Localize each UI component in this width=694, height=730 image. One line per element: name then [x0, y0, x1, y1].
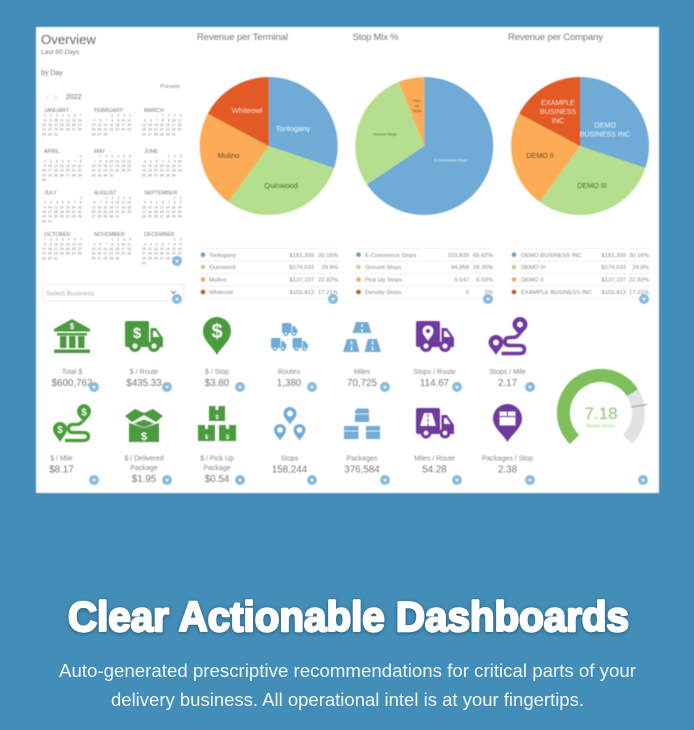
gauge: road hours: 7.18 [584, 404, 618, 423]
calendar: months: 12 13 14 15 16 17 18 [92, 123, 131, 127]
calendar: months: 28 29 30 31 [92, 173, 113, 177]
pie chart: stop mix: Stops [412, 109, 422, 113]
icon: dollar pin [203, 317, 231, 355]
icon: three roads [343, 322, 381, 352]
legend table: stop mix: 0 [466, 290, 470, 296]
calendar: months: MAY [94, 149, 106, 155]
pie chart: stop mix: Up [415, 104, 419, 108]
calendar: months: 1 [42, 155, 82, 159]
calendar: months: 15 16 17 18 19 20 21 [42, 247, 82, 251]
text: presets: Presets [160, 84, 180, 90]
calendar: months: 16 17 18 19 20 21 22 [42, 169, 82, 173]
calendar: months: 29 30 31 [42, 132, 58, 136]
calendar: months: 2 3 4 5 6 7 8 [42, 201, 82, 205]
legend table: revenue per terminal: Quinwood [209, 265, 236, 271]
legend table: revenue per company: $137,107 [601, 278, 626, 284]
legend table: stop mix: 9,547 [454, 278, 469, 284]
icon: open dollar box: $ [141, 431, 147, 443]
calendar: months: 9 10 11 12 13 14 15 [42, 205, 82, 209]
calendar: months: 26 27 28 29 30 [92, 256, 119, 260]
chart heading: revenue per terminal: Revenue per Terminal [197, 32, 288, 43]
legend table: revenue per company: 17.21% [629, 290, 650, 296]
legend table: revenue per company: DEMO BUSINESS INC [521, 253, 583, 259]
calendar: months: 22 23 24 25 26 27 28 [42, 252, 82, 256]
calendar: months: SEPTEMBER [144, 190, 177, 196]
chart heading: revenue per company: Revenue per Company [508, 32, 603, 43]
metric: packages: Packages [347, 456, 378, 462]
calendar: months: 2 3 4 5 6 7 8 [42, 159, 82, 163]
calendar: months: 1 2 [142, 196, 182, 200]
metric: dollars per mile: $8.17 [49, 464, 74, 476]
metric: dollars per mile [49, 456, 74, 476]
metric: dollars per stop: $ / Stop [205, 369, 229, 376]
calendar: months: AUGUST [94, 190, 117, 196]
metric: packages per stop: Packages / Stop [482, 456, 533, 462]
title: Clear Actionable Dashboards [68, 593, 629, 640]
legend table: stop mix: Pick Up Stops [365, 278, 402, 284]
calendar: months: MARCH [144, 108, 164, 114]
metric: stops per route: 114.67 [420, 378, 449, 389]
metric: dollars per route: $ / Route [130, 369, 158, 376]
metric: dollars per delivered package: $1.95 [132, 474, 157, 485]
calendar: months: 11 12 13 14 15 16 17 [142, 164, 182, 168]
legend table: revenue per terminal: Whiteowl [209, 290, 233, 296]
calendar: months: 16 17 18 19 20 21 22 [42, 210, 82, 214]
calendar: months: JUNE [144, 149, 158, 155]
dropdown: select business: Select Business [46, 290, 95, 298]
gauge: road hours: Road Hours [587, 424, 616, 430]
calendar: months: 14 15 16 17 18 19 20 [92, 164, 131, 168]
calendar: months: 1 2 3 4 [92, 114, 131, 118]
metric: total dollars [52, 369, 92, 389]
legend table: stop mix: 6.03% [476, 278, 494, 284]
legend table: revenue per terminal [200, 248, 339, 298]
pie chart: revenue per terminal: Tontogany [276, 124, 311, 133]
calendar: months: 23 24 25 26 27 28 29 [42, 215, 82, 219]
legend table: revenue per terminal: 29.8% [321, 265, 339, 271]
legend table: revenue per terminal: $137,107 [289, 278, 314, 284]
calendar: months: 9 10 11 12 13 14 15 [42, 164, 82, 168]
metric: miles: Miles [354, 369, 371, 376]
calendar: months: 1 2 3 4 5 6 [92, 155, 131, 159]
icon: stacked dollar boxes: $ [205, 435, 209, 441]
metric: stops: Stops [281, 456, 299, 462]
metric: dollars per delivered package: Package [130, 465, 158, 472]
calendar: months: FEBRUARY [94, 108, 124, 114]
subtitle text: Auto-generated prescriptive recommendations for critical parts of your [59, 661, 636, 681]
metric: dollars per stop: $3.80 [205, 378, 230, 389]
icon: route between dollar pins [53, 404, 91, 442]
legend table: stop mix: 65.62% [473, 253, 494, 259]
dropdown: select business [43, 284, 184, 301]
metric: stops [272, 456, 308, 476]
legend table: revenue per company: 29.8% [632, 265, 650, 271]
legend table: revenue per company: DEMO II [521, 278, 544, 284]
pie chart: revenue per terminal: Quinwood [264, 181, 298, 190]
legend table: revenue per terminal: Mulino [209, 278, 227, 284]
pie chart: stop mix: Pick [414, 99, 421, 103]
icon: stacked dollar boxes [198, 406, 236, 441]
metric: stops per mile: 2.17 [498, 378, 517, 389]
calendar: months: 17 18 19 20 21 22 23 [142, 210, 182, 214]
calendar: months: 1 2 3 4 5 [92, 196, 131, 200]
icon: dollar pin: $ [211, 321, 223, 343]
calendar: months: 1 2 3 [142, 155, 182, 159]
legend table: revenue per company: 22.82% [629, 278, 650, 284]
metric: packages: 376,584 [344, 464, 380, 476]
year selector [46, 94, 82, 101]
calendar: months: 27 28 29 30 31 [92, 215, 119, 219]
metric: dollars per route: $435.33 [126, 378, 162, 389]
legend table: revenue per company: 30.16% [629, 253, 650, 259]
metric: stops per mile [489, 369, 526, 389]
help buttons [89, 256, 649, 485]
pie chart: stop mix: E-Commerce Stops [434, 158, 468, 162]
metric: dollars per delivered package: $ / Delivered [124, 456, 164, 462]
subtitle text: delivery business. All operational intel is at your fingertips. [111, 690, 584, 710]
icon: three trucks [271, 323, 308, 351]
icon: stacked dollar boxes: $ [226, 435, 230, 441]
metric: dollars per mile: $ / Mile [50, 456, 73, 462]
calendar: months: 13 14 15 16 17 18 19 [92, 205, 131, 209]
icon: stacked dollar boxes: $ [215, 415, 219, 421]
icon: bank [54, 319, 90, 353]
calendar: months: JANUARY [44, 108, 69, 114]
calendar: months: 19 20 21 22 23 24 25 [92, 128, 131, 132]
calendar: months: 21 22 23 24 25 26 27 [92, 169, 131, 173]
pie chart: revenue per company: DEMO III [577, 181, 607, 190]
calendar: months: DECEMBER [144, 232, 175, 238]
calendar: months: 5 6 7 8 9 10 11 [92, 242, 131, 246]
calendar: months: 26 27 28 [92, 132, 107, 136]
metric: dollars per stop [205, 369, 230, 389]
panel: dashboard [36, 27, 659, 493]
calendar: months: JULY [44, 190, 57, 196]
metric: dollars per delivered package [124, 456, 164, 485]
metric: stops per route [413, 369, 456, 389]
legend table: stop mix: E-Commerce Stops [365, 253, 416, 259]
metric: routes [277, 369, 302, 389]
calendar: months: 7 8 9 10 11 12 13 [92, 159, 131, 163]
pie chart: revenue per company [511, 77, 649, 215]
pie chart: revenue per company: INC [552, 116, 564, 125]
calendar: months: 12 13 14 15 16 17 18 [142, 123, 182, 127]
calendar: months: 1 2 [142, 238, 182, 242]
pie chart: revenue per terminal [200, 77, 338, 215]
calendar: months: 24 25 26 27 28 29 30 [142, 256, 182, 260]
calendar: months: 3 4 5 6 7 8 9 [142, 242, 182, 246]
calendar: months: 19 20 21 22 23 24 25 [92, 252, 131, 256]
legend table: revenue per terminal: 17.21% [318, 290, 339, 296]
legend table: revenue per company: $179,033 [601, 265, 627, 271]
calendar: months: 23 24 25 26 27 28 29 [42, 173, 82, 177]
calendar: months: 22 23 24 25 26 27 28 [42, 128, 82, 132]
legend table: stop mix: Ground Stops [365, 265, 401, 271]
subtitle text [59, 661, 636, 710]
pie chart: revenue per company: BUSINESS INC [580, 130, 630, 138]
calendar: months: 4 5 6 7 8 9 10 [142, 159, 182, 163]
icon: route between dollar pins: $ [57, 425, 63, 436]
metric: miles [347, 369, 378, 389]
metric: routes: 1,380 [277, 378, 302, 389]
icon: dollar truck [125, 321, 163, 352]
pie chart: stop mix [355, 77, 493, 215]
icon: bank: $ [70, 322, 75, 331]
metric: miles: 70,725 [347, 378, 378, 389]
legend table: revenue per terminal: $181,209 [289, 253, 314, 259]
legend table: revenue per company: EXAMPLE BUSINESS INC [521, 290, 593, 296]
icon: pin truck [416, 321, 454, 352]
calendar: months [42, 108, 182, 265]
calendar: months: 1 2 3 4 [142, 114, 182, 118]
calendar: months: 1 2 3 4 [92, 238, 131, 242]
metric: routes: Routes [278, 369, 301, 376]
metric: dollars per route [126, 369, 162, 389]
legend table: revenue per company: DEMO III [521, 265, 546, 271]
icon: open dollar box [125, 409, 163, 443]
legend table: revenue per terminal: $179,033 [289, 265, 315, 271]
calendar: months: 24 25 26 27 28 29 30 [142, 215, 182, 219]
calendar: months: 30 [42, 178, 46, 182]
calendar: months: 5 6 7 8 9 10 11 [142, 118, 182, 122]
pie chart: stop mix: Ground Stops [373, 132, 397, 136]
legend table: revenue per company [510, 248, 650, 298]
icon: route between dollar pins: $ [81, 408, 87, 418]
calendar: months: 19 20 21 22 23 24 25 [142, 128, 182, 132]
legend table: revenue per company: $181,209 [601, 253, 626, 259]
calendar: months: 1 [42, 196, 82, 200]
metric: miles per route [414, 456, 455, 476]
icon: three pins [274, 407, 306, 440]
legend table: revenue per terminal: Tontogany [209, 253, 236, 259]
calendar: months: 3 4 5 6 7 8 9 [142, 201, 182, 205]
metric: dollars per pick up package: Package [203, 465, 231, 472]
legend table: revenue per terminal: 30.16% [318, 253, 339, 259]
calendar: months: 6 7 8 9 10 11 12 [92, 201, 131, 205]
calendar: months: OCTOBER [44, 232, 71, 238]
calendar: months: 5 6 7 8 9 10 11 [92, 118, 131, 122]
calendar: months: 15 16 17 18 19 20 21 [42, 123, 82, 127]
pie chart: revenue per company: EXAMPLE [541, 98, 575, 107]
calendar: months: 17 18 19 20 21 22 23 [142, 252, 182, 256]
metric: stops per mile: Stops / Mile [489, 369, 526, 376]
legend table: stop mix: 0% [484, 290, 494, 296]
legend table: revenue per terminal: $103,413 [289, 290, 315, 296]
legend table: stop mix: 44,858 [451, 265, 470, 271]
metric: total dollars: Total $ [62, 369, 82, 376]
metric: total dollars: $600,762 [52, 378, 92, 389]
metric: dollars per pick up package: $ / Pick Up [200, 456, 234, 462]
icon: road truck [416, 408, 454, 438]
calendar: months: 18 19 20 21 22 23 24 [142, 169, 182, 173]
panel: overview and calendar [41, 32, 184, 301]
legend table: stop mix: Density Stops [365, 290, 401, 296]
pie chart: revenue per terminal: Whiteowl [232, 106, 263, 115]
metric: stops: 158,244 [272, 464, 308, 476]
legend table: stop mix [355, 248, 494, 298]
calendar: months: 10 11 12 13 14 15 16 [142, 247, 182, 251]
calendar: months: 29 30 31 [42, 256, 58, 260]
year selector: 2022 [66, 94, 82, 101]
calendar: months: 30 31 [42, 219, 52, 223]
calendar: months: 12 13 14 15 16 17 18 [92, 247, 131, 251]
metric: stops per route: Stops / Route [413, 369, 456, 376]
icon: three packages [344, 408, 380, 439]
metric: packages [344, 456, 380, 476]
metric: miles per route: Miles / Route [414, 456, 455, 462]
legend table: revenue per company: $103,413 [601, 290, 627, 296]
heading: overview: Overview [41, 32, 96, 47]
calendar: months: 1 2 3 4 5 6 7 [42, 114, 82, 118]
legend table: stop mix: 103,839 [448, 253, 469, 259]
pie chart: revenue per company: DEMO [594, 120, 616, 130]
calendar: months: 8 9 10 11 12 13 14 [42, 118, 82, 122]
pie chart: revenue per terminal: Mulino [217, 151, 240, 160]
metric: miles per route: 54.28 [422, 464, 447, 476]
calendar: months: 10 11 12 13 14 15 16 [142, 205, 182, 209]
chart heading: stop mix: Stop Mix % [352, 32, 399, 43]
text: by day: by Day [41, 70, 63, 77]
calendar: months: 8 9 10 11 12 13 14 [42, 242, 82, 246]
metric: dollars per pick up package: $0.54 [205, 474, 230, 485]
pie chart: revenue per company: BUSINESS [540, 107, 576, 116]
icon: route between pins purple [488, 317, 528, 355]
calendar: months: NOVEMBER [94, 232, 125, 238]
calendar: months: 25 26 27 28 29 30 [142, 173, 176, 177]
metric: packages per stop [482, 456, 533, 476]
pie chart: revenue per company: DEMO II [526, 151, 554, 160]
calendar: months: 20 21 22 23 24 25 26 [92, 210, 131, 214]
calendar: months: 31 [142, 261, 146, 265]
icon: package pin [493, 404, 522, 442]
text: date range: Last 60 Days [41, 49, 80, 56]
calendar: months: 26 27 28 29 30 31 [142, 132, 176, 136]
metric: packages per stop: 2.38 [498, 464, 518, 476]
calendar: months: 1 2 3 4 5 6 7 [42, 238, 82, 242]
legend table: revenue per terminal: 22.82% [318, 278, 339, 284]
icon: dollar truck: $ [133, 325, 142, 342]
metric: dollars per pick up package [200, 456, 234, 485]
legend table: stop mix: 28.35% [473, 265, 494, 271]
gauge: road hours [563, 375, 647, 440]
calendar: months: APRIL [44, 149, 60, 155]
